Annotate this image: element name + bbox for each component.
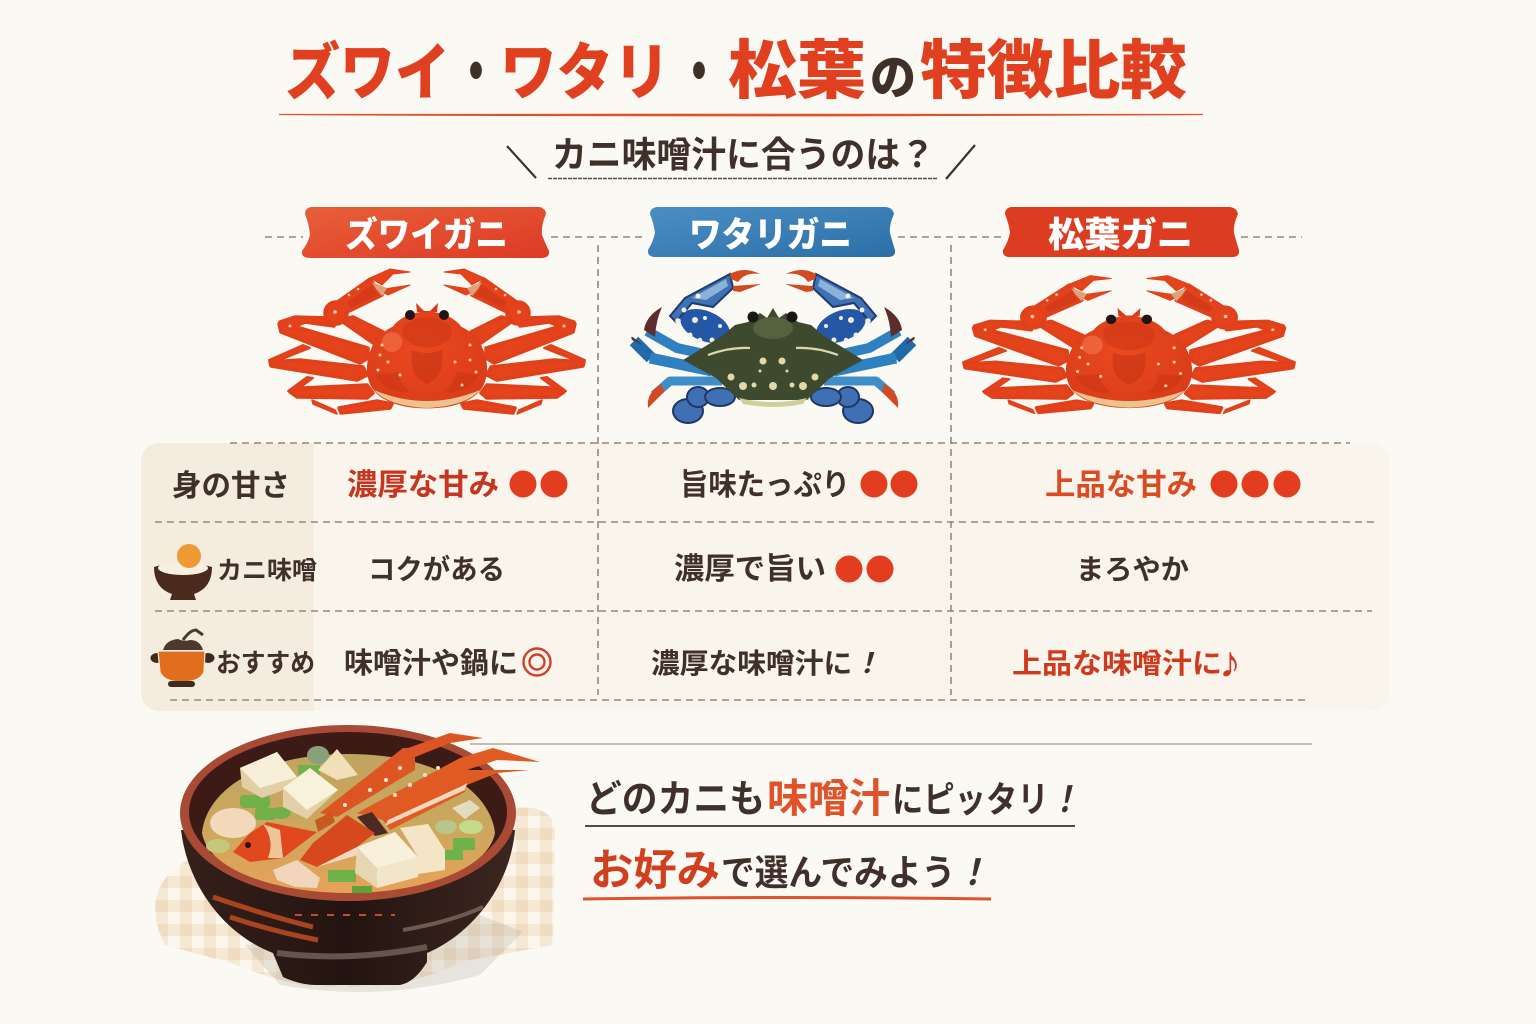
ribbon: 松葉ガニ — [1003, 207, 1239, 257]
cell: ワタリ recommendation: 濃厚な味噌汁に！ — [651, 648, 881, 679]
cell: ズワイ sweetness — [347, 469, 568, 502]
title — [285, 35, 1187, 108]
cell: ワタリ miso: 濃厚で旨い — [674, 553, 826, 586]
title: の — [870, 52, 916, 105]
title: ワタリ — [500, 39, 670, 108]
cell: ズワイ miso: コクがある — [368, 553, 505, 585]
cell: ズワイ recommendation: 味噌汁や鍋に — [344, 647, 518, 680]
icon: crab miso bowl — [154, 544, 212, 600]
grid lines and header dashes — [155, 237, 1375, 700]
icon: snow crab — [269, 269, 585, 414]
row label: おすすめ: おすすめ — [216, 648, 315, 678]
message line 1: 味噌汁 — [767, 777, 890, 821]
ribbon: 松葉ガニ: 松葉ガニ — [1048, 216, 1193, 255]
title: ・ — [455, 39, 497, 108]
message line 2: お好み — [590, 847, 720, 895]
cell: 松葉 miso: まろやか — [1076, 554, 1189, 585]
table panel background — [141, 443, 1389, 711]
cell: 松葉 recommendation: ♪ — [1219, 638, 1241, 687]
cell: 松葉 recommendation — [1012, 638, 1241, 687]
cell: 松葉 recommendation: 上品な味噌汁に — [1012, 648, 1222, 679]
icon: blue swimming crab — [631, 270, 915, 423]
divider — [470, 743, 1312, 745]
cell: ワタリ sweetness: 旨味たっぷり — [680, 469, 850, 502]
ribbon: ズワイガニ — [302, 207, 549, 258]
message line 1 — [585, 777, 1080, 826]
row label: 身の甘さ: 身の甘さ — [172, 470, 290, 503]
message line 1: どのカニも — [586, 779, 765, 821]
subtitle: カニ味噌汁に合うのは？ — [552, 134, 935, 175]
title: 松葉 — [728, 35, 866, 107]
cell: ズワイ sweetness: 濃厚な甘み — [347, 469, 499, 502]
icon: crab miso soup bowl — [155, 725, 555, 992]
icon: matsuba crab — [963, 276, 1295, 413]
message line 2: で選んでみよう！ — [721, 852, 989, 893]
message line 1: にピッタリ！ — [892, 779, 1080, 820]
row label: カニ味噌: カニ味噌 — [217, 557, 317, 585]
ribbon: ワタリガニ: ワタリガニ — [689, 216, 852, 255]
crab claws — [233, 733, 540, 867]
title: ・ — [678, 39, 720, 108]
cell: ワタリ miso — [674, 553, 894, 586]
tofu cubes — [210, 749, 480, 888]
title: 特徴比較 — [920, 35, 1187, 107]
icon: miso pot — [150, 630, 214, 687]
cell: 松葉 sweetness: 上品な甘み — [1045, 469, 1197, 502]
cell: 松葉 sweetness — [1045, 469, 1300, 502]
title underline — [279, 114, 1203, 116]
title: ズワイ — [285, 38, 450, 108]
message line 2 — [583, 847, 991, 899]
ribbon: ズワイガニ: ズワイガニ — [345, 215, 508, 255]
ribbon: ワタリガニ — [648, 207, 895, 257]
